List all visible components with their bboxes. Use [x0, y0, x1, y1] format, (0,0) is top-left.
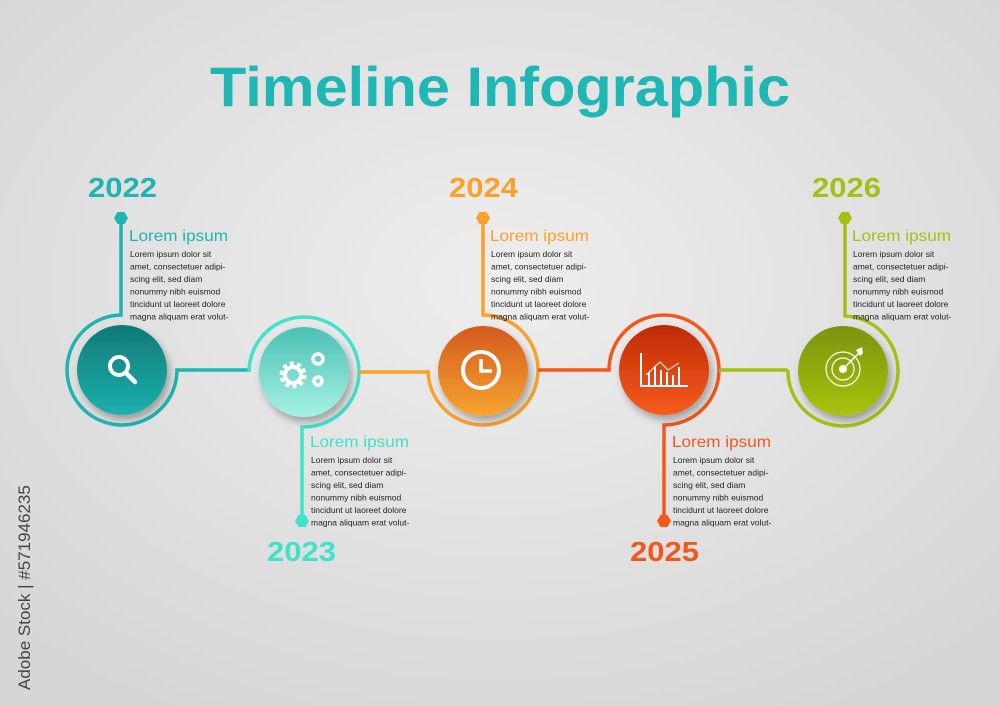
step 4: 2025 [619, 325, 771, 567]
step 3: 2024 [438, 172, 589, 416]
step 1: 2022: Lorem ipsum dolor sit [130, 249, 212, 259]
step 5: 2026: nonummy nibh euismod [853, 286, 944, 296]
step 2: 2023: nonummy nibh euismod [311, 492, 402, 502]
title: Timeline Infographic [210, 55, 790, 118]
step 5: 2026: 2026 [812, 172, 881, 203]
step 3: 2024: Lorem ipsum [490, 228, 589, 245]
icon: magnifier button [77, 325, 167, 415]
step 3: 2024: nonummy nibh euismod [491, 286, 582, 296]
step 4: 2025: amet, consectetuer adipi- [673, 468, 769, 478]
timeline connectors [67, 218, 898, 521]
step 2: 2023 [259, 327, 409, 567]
step 2: 2023: amet, consectetuer adipi- [311, 468, 407, 478]
step 5: 2026: tincidunt ut laoreet dolore [853, 299, 949, 309]
step 4: 2025: nonummy nibh euismod [673, 492, 764, 502]
step 1: 2022: magna aliquam erat volut- [130, 312, 228, 322]
step 1: 2022 [77, 172, 228, 415]
step 5: 2026: Lorem ipsum [852, 228, 951, 245]
step 4: 2025: 2025 [630, 536, 699, 567]
icon: gears button [259, 327, 349, 417]
hexagon markers [114, 212, 852, 527]
step 3: 2024: tincidunt ut laoreet dolore [491, 299, 587, 309]
watermark id: Adobe Stock | #571946235 [15, 485, 34, 690]
step 1: 2022: scing elit, sed diam [130, 274, 202, 284]
step 4: 2025: magna aliquam erat volut- [673, 518, 771, 528]
step 4: 2025: scing elit, sed diam [673, 480, 745, 490]
step 1: 2022: Lorem ipsum [129, 228, 228, 245]
step 5: 2026: amet, consectetuer adipi- [853, 262, 949, 272]
step 4: 2025: Lorem ipsum [672, 434, 771, 451]
icon: target button [798, 326, 888, 416]
step 2: 2023: Lorem ipsum dolor sit [311, 455, 393, 465]
step 2: 2023: 2023 [267, 536, 336, 567]
step 2: 2023: tincidunt ut laoreet dolore [311, 505, 407, 515]
step 3: 2024: amet, consectetuer adipi- [491, 262, 587, 272]
step 5: 2026: scing elit, sed diam [853, 274, 925, 284]
step 1: 2022: tincidunt ut laoreet dolore [130, 299, 226, 309]
step 3: 2024: 2024 [449, 172, 518, 203]
icon: chart button [619, 325, 709, 415]
step 5: 2026: magna aliquam erat volut- [853, 312, 951, 322]
step 3: 2024: magna aliquam erat volut- [491, 312, 589, 322]
step 3: 2024: Lorem ipsum dolor sit [491, 249, 573, 259]
step 2: 2023: Lorem ipsum [310, 434, 409, 451]
step 4: 2025: tincidunt ut laoreet dolore [673, 505, 769, 515]
step 1: 2022: 2022 [88, 172, 157, 203]
step 5: 2026: Lorem ipsum dolor sit [853, 249, 935, 259]
icon: clock button [438, 326, 528, 416]
step 1: 2022: amet, consectetuer adipi- [130, 262, 226, 272]
step 2: 2023: scing elit, sed diam [311, 480, 383, 490]
step 5: 2026 [798, 172, 951, 416]
step 3: 2024: scing elit, sed diam [491, 274, 563, 284]
step 4: 2025: Lorem ipsum dolor sit [673, 455, 755, 465]
step 1: 2022: nonummy nibh euismod [130, 286, 221, 296]
step 2: 2023: magna aliquam erat volut- [311, 518, 409, 528]
